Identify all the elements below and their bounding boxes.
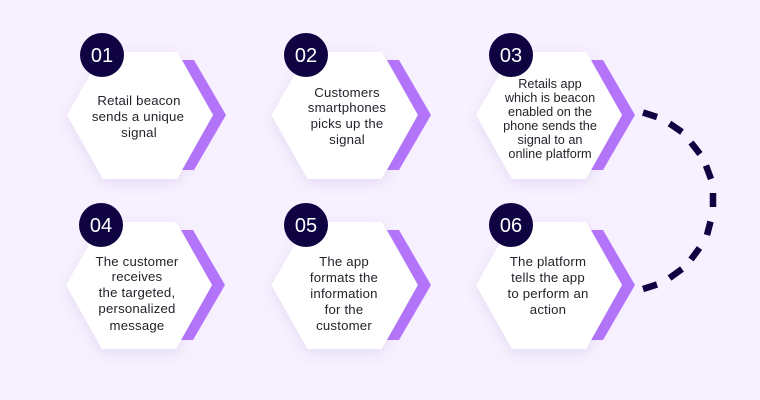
step 05: for the <box>325 302 363 317</box>
step 04: receives <box>112 269 163 284</box>
step 05: information <box>310 286 378 301</box>
step 01 <box>67 33 226 179</box>
step 04: 04 <box>90 215 112 237</box>
step 01: signal <box>121 125 157 140</box>
step 06: tells the app <box>511 270 585 285</box>
step 01: sends a unique <box>92 109 184 124</box>
step 05: formats the <box>310 270 378 285</box>
step 05 <box>272 203 431 349</box>
step 06 <box>476 203 635 349</box>
step 04: personalized <box>98 301 176 316</box>
step 04: The customer <box>95 254 179 269</box>
step 01: Retail beacon <box>97 93 181 108</box>
step 02: signal <box>329 132 365 147</box>
step 03: enabled on the <box>508 105 592 119</box>
step 06: to perform an <box>507 286 589 301</box>
step 02 <box>272 33 431 179</box>
step 06: The platform <box>510 254 586 269</box>
step 02: 02 <box>295 45 317 67</box>
step 05: customer <box>316 318 372 333</box>
step 03: which is beacon <box>504 91 595 105</box>
step 03: online platform <box>508 147 592 161</box>
step 03 <box>476 33 635 179</box>
step 01: 01 <box>91 45 113 67</box>
step 03: Retails app <box>518 77 582 91</box>
step 02: Customers <box>314 85 380 100</box>
dashed connector arc <box>643 112 713 289</box>
step 04 <box>66 203 225 349</box>
step 05: The app <box>319 254 369 269</box>
step 03: phone sends the <box>503 119 597 133</box>
step 06: action <box>530 302 566 317</box>
step 04: message <box>110 318 164 333</box>
step 02: smartphones <box>308 100 386 115</box>
step 03: signal to an <box>518 133 582 147</box>
step 03: 03 <box>500 45 522 67</box>
step 05: 05 <box>295 215 317 237</box>
step 04: the targeted, <box>99 285 175 300</box>
step 06: 06 <box>500 215 522 237</box>
step 02: picks up the <box>311 116 383 131</box>
